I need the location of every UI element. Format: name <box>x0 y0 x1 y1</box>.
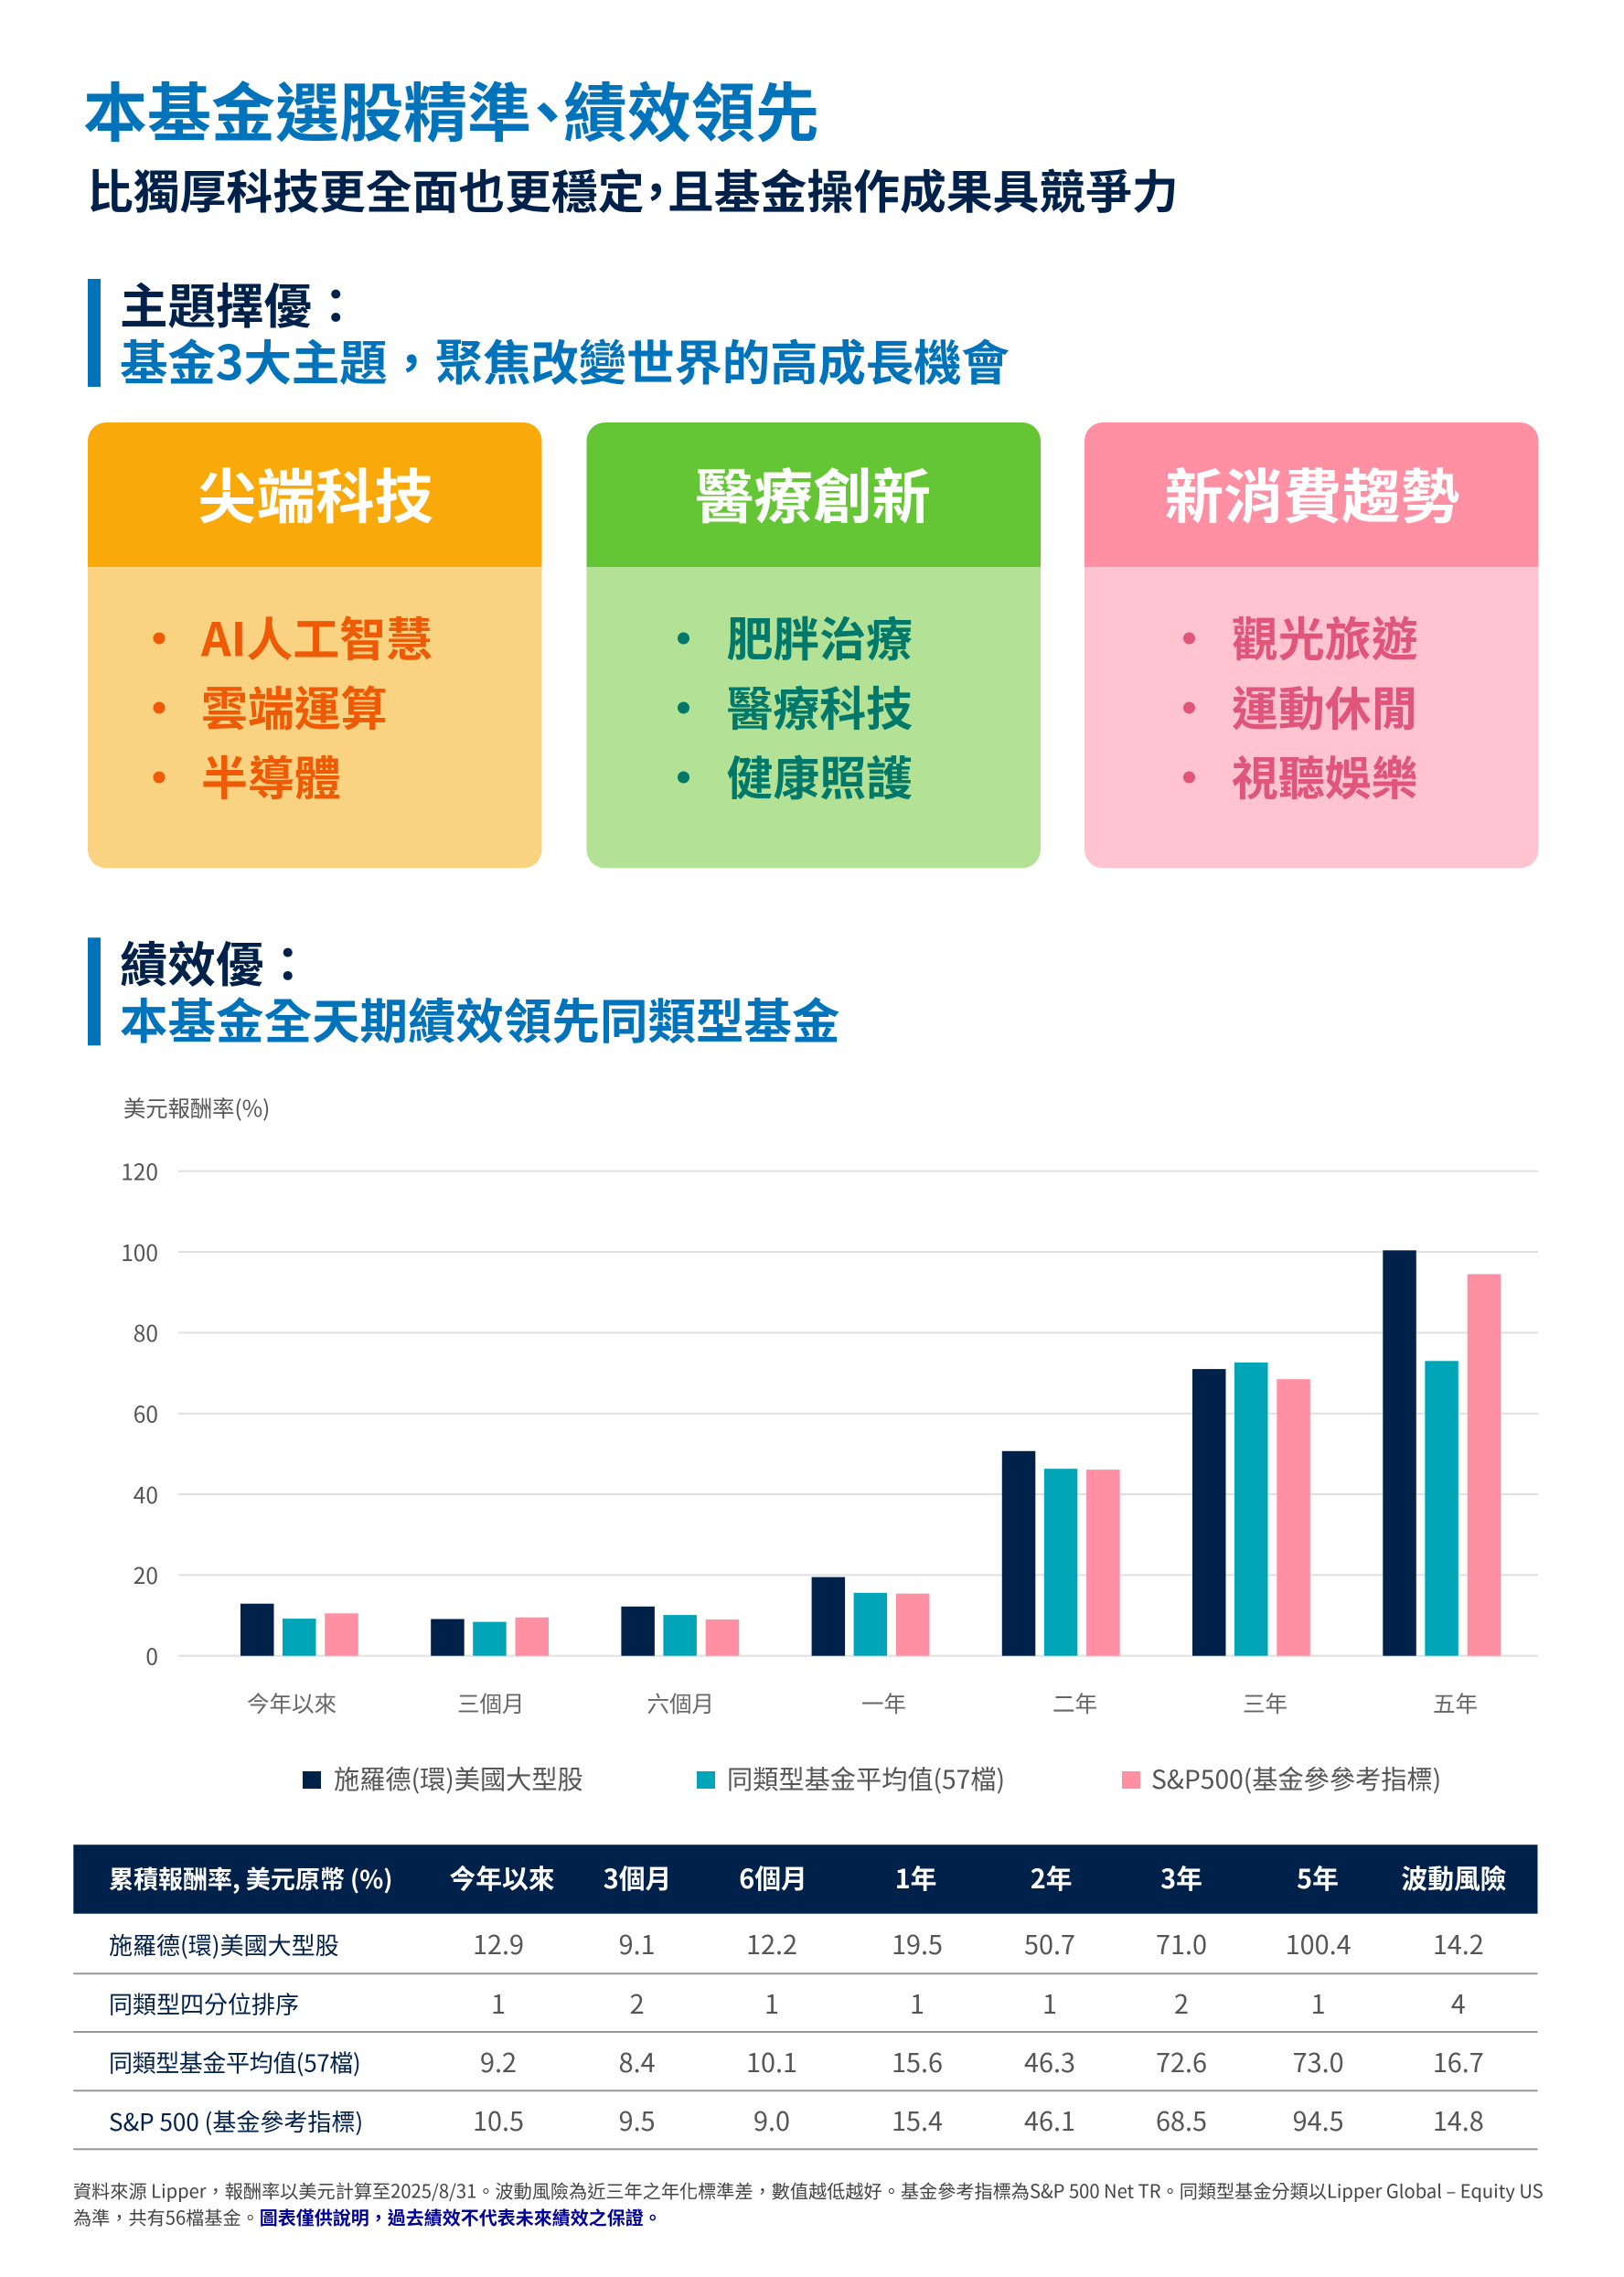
performance table: 3個月 <box>604 1859 671 1897</box>
panel: new consumer trends: 運動休閒 <box>1232 671 1418 739</box>
bar chart: USD return: 今年以來 <box>247 1687 337 1719</box>
panel: healthcare innovation: 肥胖治療 <box>726 602 913 669</box>
bar chart: USD return: 一年 <box>861 1687 906 1719</box>
performance table: 波動風險 <box>1401 1859 1507 1897</box>
performance table: 1 <box>1311 1984 1326 2022</box>
panel: cutting-edge technology: 尖端科技 <box>198 449 433 535</box>
bar chart: USD return: 三年 <box>1243 1687 1287 1719</box>
performance table: 50.7 <box>1024 1925 1075 1962</box>
section heading: theme selection: 主題擇優： <box>120 269 360 338</box>
performance table: 94.5 <box>1293 2101 1344 2139</box>
performance table: 1 <box>764 1984 779 2022</box>
performance table: 4 <box>1451 1984 1466 2022</box>
performance table: 16.7 <box>1433 2043 1484 2080</box>
footnote: 資料來源 Lipper，報酬率以美元計算至2025/8/31。波動風險為近三年之年化標準差，數值越低越好。基金參考指標為S&P 500 Net TR。同類型基金分類以Lipper Global – Equity US <box>73 2176 1544 2204</box>
bar chart: USD return: 20 <box>134 1559 158 1591</box>
chart legend: 施羅德(環)美國大型股 <box>334 1759 583 1797</box>
chart legend: 同類型基金平均值(57檔) <box>727 1759 1005 1797</box>
panel: healthcare innovation <box>587 422 1041 868</box>
performance table: 14.2 <box>1433 1925 1484 1962</box>
performance table: 今年以來 <box>449 1859 555 1897</box>
bar chart: USD return <box>121 1091 1538 1719</box>
performance table: 19.5 <box>892 1925 943 1962</box>
bar chart: USD return: 二年 <box>1052 1687 1097 1719</box>
performance table: 1 <box>1042 1984 1057 2022</box>
bar chart: USD return: 六個月 <box>647 1687 714 1719</box>
performance table: 9.1 <box>619 1925 656 1962</box>
section heading: theme selection <box>88 269 1010 395</box>
performance table: 73.0 <box>1293 2043 1344 2080</box>
panel: cutting-edge technology: 雲端運算 <box>201 671 388 739</box>
performance table: 12.2 <box>746 1925 797 1962</box>
performance table: 1年 <box>895 1859 936 1897</box>
performance table: 14.8 <box>1433 2101 1484 2139</box>
performance table: 施羅德(環)美國大型股 <box>109 1928 339 1962</box>
panel: healthcare innovation: 健康照護 <box>726 741 913 808</box>
panel: healthcare innovation: 醫療科技 <box>726 671 913 739</box>
bar chart: USD return: 五年 <box>1433 1687 1478 1719</box>
footnote: 為準，共有56檔基金。圖表僅供說明，過去績效不代表未來績效之保證。 <box>73 2204 662 2230</box>
performance table: 8.4 <box>619 2043 656 2080</box>
bar chart: USD return: 80 <box>134 1317 158 1349</box>
section heading: performance: 本基金全天期績效領先同類型基金 <box>120 984 840 1053</box>
bar chart: USD return: 40 <box>134 1479 158 1511</box>
panel: new consumer trends: 觀光旅遊 <box>1232 602 1418 669</box>
panel: new consumer trends: 新消費趨勢 <box>1165 449 1459 535</box>
performance table: 9.0 <box>753 2101 790 2139</box>
title: 本基金選股精準、績效領先 <box>83 62 819 155</box>
panel: cutting-edge technology: 半導體 <box>201 741 341 808</box>
section heading: theme selection: 基金3大主題，聚焦改變世界的高成長機會 <box>120 326 1010 395</box>
performance table: 3年 <box>1160 1859 1202 1897</box>
bar chart: USD return: 100 <box>121 1236 158 1268</box>
panel: healthcare innovation: 醫療創新 <box>695 449 931 535</box>
performance table: 1 <box>910 1984 924 2022</box>
performance table: 6個月 <box>739 1859 807 1897</box>
chart legend: S&P500(基金參參考指標) <box>1151 1759 1441 1797</box>
performance table: 1 <box>491 1984 506 2022</box>
panel: cutting-edge technology <box>88 422 541 868</box>
bar chart: USD return: 三個月 <box>457 1687 525 1719</box>
performance table: 9.5 <box>619 2101 656 2139</box>
performance table: 15.4 <box>892 2101 943 2139</box>
performance table: 5年 <box>1297 1859 1339 1897</box>
footnote <box>73 2176 1544 2230</box>
panel: new consumer trends <box>1084 422 1538 868</box>
bar chart: USD return: 60 <box>134 1397 158 1430</box>
performance table: 同類型基金平均值(57檔) <box>109 2046 360 2079</box>
panel: new consumer trends: 視聽娛樂 <box>1232 741 1418 808</box>
subtitle: 比獨厚科技更全面也更穩定，且基金操作成果具競爭力 <box>87 155 1179 222</box>
performance table: 12.9 <box>473 1925 524 1962</box>
performance table: 15.6 <box>892 2043 943 2080</box>
performance table: 100.4 <box>1286 1925 1352 1962</box>
section heading: performance <box>88 927 840 1053</box>
performance table: 72.6 <box>1156 2043 1207 2080</box>
performance table: 71.0 <box>1156 1925 1207 1962</box>
performance table: S&P 500 (基金參考指標) <box>109 2104 363 2138</box>
bar chart: USD return: 0 <box>145 1641 158 1672</box>
performance table: 同類型四分位排序 <box>109 1987 299 2021</box>
performance table: 2 <box>1174 1984 1189 2022</box>
chart legend <box>303 1759 1441 1797</box>
performance table: 9.2 <box>480 2043 517 2080</box>
section heading: performance: 績效優： <box>120 927 312 997</box>
panel: cutting-edge technology: AI人工智慧 <box>200 602 433 669</box>
performance table <box>73 1844 1537 2149</box>
performance table: 2 <box>630 1984 645 2022</box>
performance table: 68.5 <box>1156 2101 1207 2139</box>
performance table: 10.1 <box>746 2043 797 2080</box>
performance table: 2年 <box>1031 1859 1073 1897</box>
bar chart: USD return: 120 <box>121 1156 158 1187</box>
performance table: 46.1 <box>1024 2101 1075 2139</box>
performance table: 累積報酬率, 美元原幣 (%) <box>109 1860 392 1896</box>
bar chart: USD return: 美元報酬率(%) <box>123 1091 270 1123</box>
performance table: 46.3 <box>1024 2043 1075 2080</box>
performance table: 10.5 <box>473 2101 524 2139</box>
